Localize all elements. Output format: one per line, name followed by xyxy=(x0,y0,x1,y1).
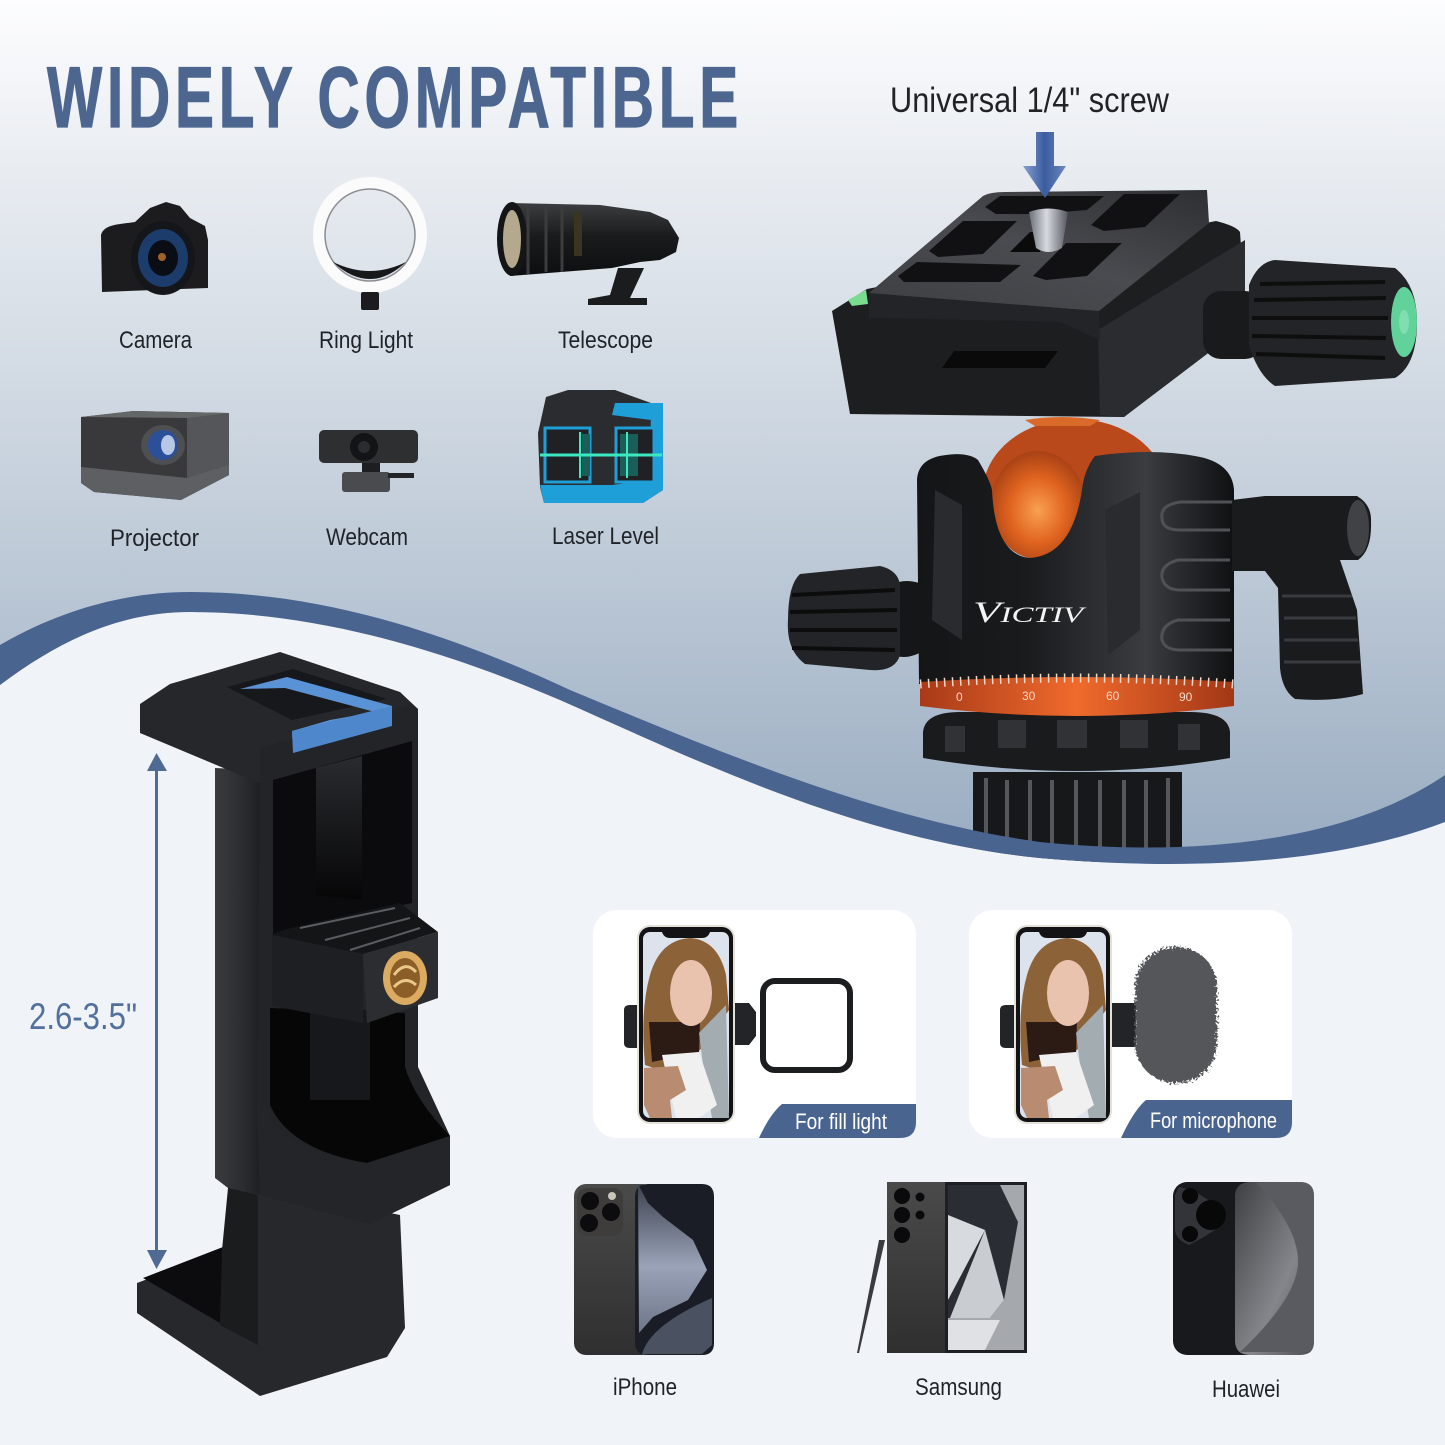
body panels xyxy=(932,490,1140,655)
product: ball head xyxy=(788,190,1417,862)
title: WIDELY COMPATIBLE xyxy=(47,50,743,146)
screw xyxy=(1010,208,1068,252)
microphone xyxy=(1135,947,1217,1083)
icon: camera xyxy=(101,202,208,295)
plate front xyxy=(869,293,1100,340)
angle scale: 30 xyxy=(1022,689,1036,703)
clamp knob xyxy=(1203,260,1417,386)
label: telescope: Telescope xyxy=(558,327,653,354)
clamp lower window xyxy=(270,1008,450,1163)
tag xyxy=(1121,1100,1292,1138)
clips xyxy=(624,1003,756,1048)
plate pads xyxy=(898,194,1180,282)
ball neck xyxy=(1025,417,1100,426)
clamp window xyxy=(273,741,412,935)
icon: webcam xyxy=(319,430,418,492)
bubble level xyxy=(848,290,868,306)
label: iPhone: iPhone xyxy=(613,1374,677,1401)
tag text: For fill light xyxy=(795,1109,887,1134)
slot xyxy=(942,351,1058,368)
ball xyxy=(983,419,1167,565)
body xyxy=(917,452,1234,695)
arrow: down to screw xyxy=(1023,132,1066,198)
label: camera: Camera xyxy=(119,327,193,354)
logo: V ICTIV xyxy=(973,596,1087,629)
right lever xyxy=(1232,496,1371,700)
clamp lower block xyxy=(137,1180,405,1396)
product: phone clamp xyxy=(137,652,450,1396)
wave band xyxy=(0,592,1445,864)
lower light area xyxy=(0,612,1445,1445)
tag xyxy=(759,1104,916,1138)
ball highlight xyxy=(991,451,1085,559)
lock ring xyxy=(923,712,1230,771)
angle scale: 60 xyxy=(1106,689,1120,703)
dimension label: 2.6-3.5" xyxy=(29,996,137,1037)
window divider xyxy=(316,756,362,900)
tag text: For microphone xyxy=(1150,1108,1277,1133)
clamp spine xyxy=(215,768,262,1195)
phone xyxy=(637,925,735,1124)
blue window xyxy=(292,706,392,753)
top plate xyxy=(869,190,1209,311)
base stem xyxy=(973,772,1182,862)
icon: telescope xyxy=(497,202,679,305)
icon: laser level xyxy=(538,390,663,503)
phone: Samsung xyxy=(857,1182,1027,1353)
panel: fill light xyxy=(593,910,916,1138)
lower grip pad xyxy=(143,1247,223,1323)
fill light xyxy=(763,981,850,1070)
screw label: Universal 1/4" screw xyxy=(890,81,1170,120)
dimension arrow xyxy=(147,753,167,1269)
brass insert xyxy=(383,951,427,1005)
background xyxy=(0,0,1445,870)
phone xyxy=(1014,925,1112,1124)
left knob xyxy=(788,566,925,670)
mount block xyxy=(272,903,438,1023)
panel: microphone xyxy=(969,910,1292,1138)
angle scale: 90 xyxy=(1179,690,1193,704)
quick-release clamp xyxy=(832,221,1246,417)
angle scale xyxy=(920,677,1234,716)
label: Samsung: Samsung xyxy=(915,1374,1002,1401)
icon: ring light xyxy=(319,183,421,310)
icon: projector xyxy=(81,411,229,500)
clamp top cap xyxy=(140,652,418,782)
label: ring light: Ring Light xyxy=(319,327,413,354)
lower slider xyxy=(220,1188,258,1345)
label: webcam: Webcam xyxy=(326,524,408,551)
angle scale: 0 xyxy=(956,690,963,704)
label: Huawei: Huawei xyxy=(1212,1376,1280,1403)
phone: Huawei xyxy=(1173,1182,1314,1355)
body grooves xyxy=(1162,502,1235,650)
clips xyxy=(1000,1003,1136,1048)
label: laser level: Laser Level xyxy=(552,523,659,550)
top blue slot xyxy=(240,677,392,753)
tray front xyxy=(257,1111,450,1224)
top slot recess xyxy=(227,669,387,720)
lower pocket wall xyxy=(310,1010,370,1100)
label: projector: Projector xyxy=(110,525,199,552)
phone: iPhone xyxy=(574,1184,714,1355)
clamp side face xyxy=(1098,240,1245,417)
clamp frame xyxy=(257,704,450,1224)
